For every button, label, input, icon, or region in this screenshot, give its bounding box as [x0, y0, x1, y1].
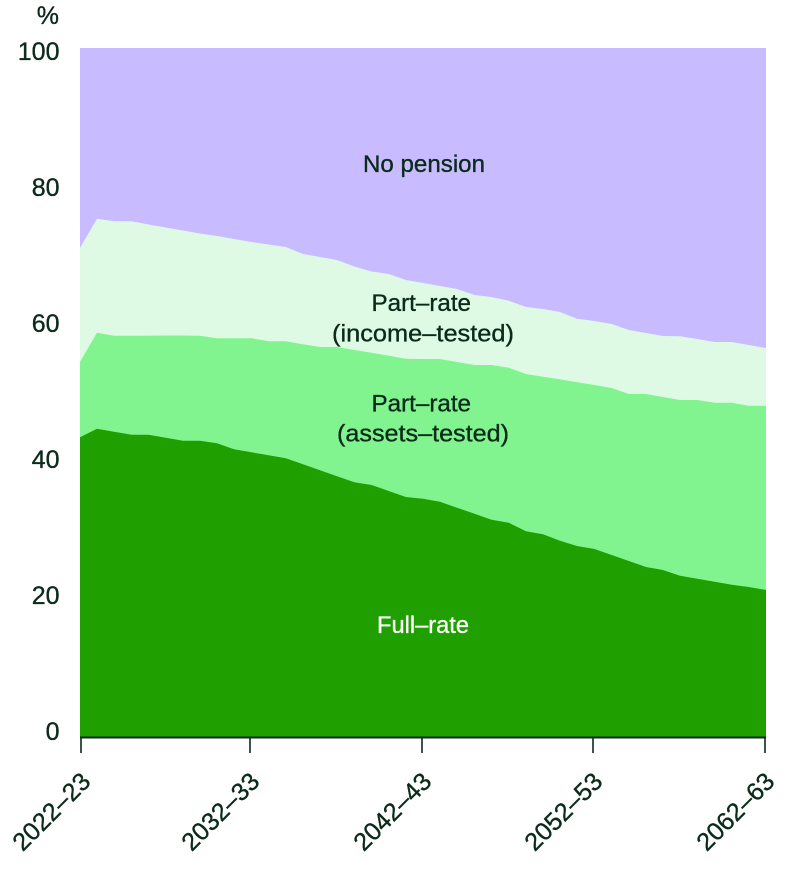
- y axis labels: %: [37, 2, 59, 30]
- label: part-rate assets-tested: (assets–tested): [337, 420, 509, 448]
- x axis labels: 2052–53: [519, 767, 608, 857]
- y axis labels: [18, 2, 60, 746]
- y axis labels: 80: [32, 174, 60, 202]
- x axis labels: 2042–43: [348, 767, 437, 857]
- area: part-rate income-tested: [80, 219, 766, 737]
- label: part-rate assets-tested: Part–rate: [372, 390, 471, 418]
- label: no pension: No pension: [363, 151, 485, 178]
- label: full-rate: Full–rate: [377, 612, 469, 639]
- y axis labels: 40: [32, 446, 60, 474]
- y axis labels: 0: [46, 718, 60, 746]
- x axis labels: [7, 767, 780, 857]
- x axis labels: 2032–33: [176, 767, 265, 857]
- y axis labels: 100: [18, 38, 60, 66]
- area: no pension: [80, 48, 766, 737]
- area: part-rate assets-tested: [80, 333, 766, 737]
- x axis labels: 2022–23: [7, 767, 96, 857]
- label: part-rate assets-tested: [337, 390, 509, 448]
- x axis labels: 2062–63: [691, 767, 780, 857]
- area: full-rate: [80, 429, 766, 737]
- y axis labels: 20: [32, 582, 60, 610]
- label: part-rate income-tested: (income–tested): [332, 320, 514, 348]
- label: part-rate income-tested: Part–rate: [372, 290, 471, 317]
- x axis with ticks: [80, 738, 766, 753]
- y axis labels: 60: [32, 310, 60, 338]
- label: part-rate income-tested: [332, 290, 514, 348]
